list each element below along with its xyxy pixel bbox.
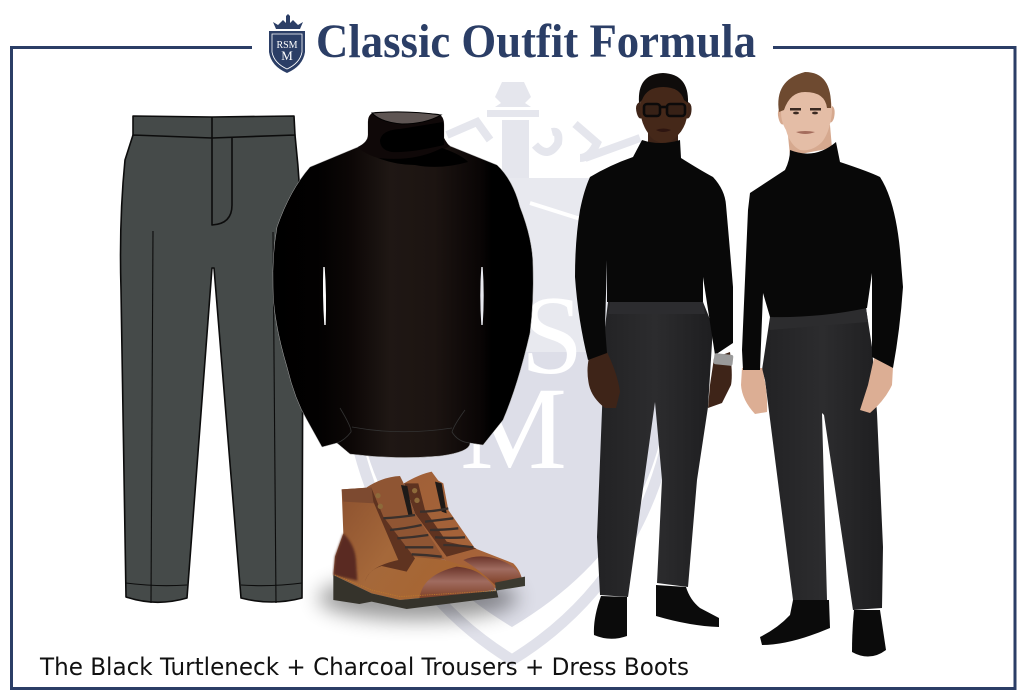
model 1 left boot — [594, 596, 627, 639]
rear boot toe — [463, 556, 523, 585]
illustration: black turtleneck — [273, 112, 533, 458]
rear boot laces — [420, 508, 473, 547]
front boot hooks — [375, 488, 420, 509]
model 2: white man in turtleneck — [741, 72, 903, 657]
watermark: crown arms — [447, 122, 640, 158]
collar fold shadow — [380, 122, 444, 152]
hem seam — [352, 427, 452, 432]
model 1 right boot — [656, 585, 719, 627]
front boot welt stitch — [335, 575, 497, 597]
boots shadow — [318, 576, 518, 620]
crown — [273, 14, 303, 29]
model 1 belt band — [608, 302, 705, 314]
illustration: brown leather boots — [333, 472, 525, 609]
title logo: crest — [269, 14, 305, 73]
left cuff seam — [337, 408, 351, 443]
model 2 left hand — [741, 368, 767, 414]
model 2 right shoe — [852, 610, 886, 657]
model 2 waistband — [770, 308, 868, 330]
shield monogram top: RSM — [276, 40, 298, 51]
model 1 neck — [648, 125, 678, 147]
watermark: letter S: S — [521, 274, 583, 398]
shield monogram bottom: M — [281, 48, 293, 63]
fly — [212, 117, 232, 225]
collar base shadow — [378, 148, 468, 167]
trouser legs — [120, 135, 303, 602]
rear boot tongue — [401, 485, 413, 515]
watermark: shield outer band — [351, 414, 673, 660]
model 1 right hand — [708, 352, 732, 408]
model 2 ears — [778, 106, 835, 124]
model 1: black man in turtleneck — [575, 73, 733, 639]
caption: The Black Turtleneck + Charcoal Trousers + Dress Boots — [39, 653, 689, 681]
right cuff line — [241, 583, 302, 586]
model 2 sweater — [742, 142, 903, 370]
rear boot eye panel — [404, 483, 477, 557]
model 1 head — [640, 74, 688, 143]
watermark: shield upper panel — [362, 178, 662, 352]
front boot collar — [342, 487, 375, 503]
shield — [269, 31, 305, 73]
right crease — [273, 232, 276, 603]
rear boot upper — [404, 472, 523, 588]
model 1 trousers — [597, 302, 713, 597]
rear boot — [367, 472, 525, 591]
front boot toe cap — [419, 567, 495, 599]
model 2 trousers — [762, 308, 883, 610]
left crease — [151, 231, 153, 603]
right cuff seam — [452, 410, 470, 443]
turtleneck collar — [358, 112, 450, 160]
sweater body and sleeves — [273, 112, 533, 458]
watermark: white diagonal — [530, 203, 640, 240]
model 2 right hand — [860, 358, 893, 413]
watermark: tower — [487, 82, 539, 180]
front boot eye panel — [365, 488, 415, 582]
front boot upper — [333, 487, 495, 600]
model 1 watch — [713, 353, 733, 366]
model 1 ears — [636, 102, 692, 118]
illustration: charcoal trousers — [120, 116, 303, 603]
model 2 face — [781, 78, 832, 150]
front boot — [333, 487, 498, 609]
model 1 glasses — [644, 104, 685, 116]
watermark: letter M: M — [460, 363, 567, 494]
model 1 mouth — [656, 128, 671, 132]
model 1 sweater — [575, 140, 733, 360]
left cuff line — [126, 583, 187, 586]
model 2 mouth — [796, 131, 815, 134]
collar opening — [372, 112, 441, 124]
model 2 brows and eyes — [790, 108, 821, 114]
model 2 left shoe — [760, 600, 830, 645]
front boot sole — [333, 575, 498, 609]
model 2 hair — [778, 72, 831, 112]
title: Classic Outfit Formula — [316, 15, 756, 68]
rear boot sole — [495, 577, 525, 591]
model 1 hair — [639, 73, 688, 103]
front boot heel panel — [333, 533, 357, 581]
waistband — [133, 116, 295, 138]
watermark: shield lower panel — [358, 352, 666, 627]
model 1 left hand — [588, 352, 620, 408]
model 2 neck — [787, 125, 832, 156]
left arm gap — [324, 267, 325, 325]
front boot far panel — [367, 476, 448, 560]
watermark crest — [351, 82, 673, 660]
right arm gap — [481, 267, 483, 325]
front boot laces — [383, 515, 442, 557]
